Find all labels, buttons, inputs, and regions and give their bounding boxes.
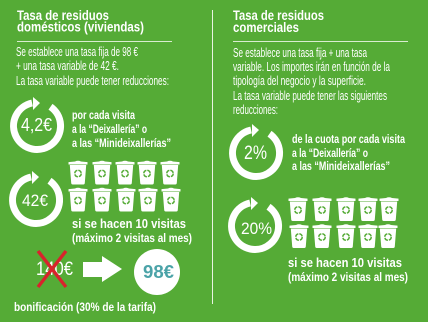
arrow: [83, 256, 122, 282]
text block: commercial rate description: tipología del negocio y la superficie.: [233, 74, 366, 88]
text block: ten visits: si se hacen 10 visitas: [72, 216, 186, 231]
text block: domestic rate description: La tasa variable puede tener reducciones:: [16, 74, 169, 88]
heading: domestic waste: domésticos (viviendas): [17, 20, 144, 34]
text block: commercial rate description: [233, 46, 390, 117]
icon: 2 percent cycle: 2%: [244, 143, 267, 164]
text block: per visit: [72, 110, 171, 150]
heading: commercial waste: Tasa de residuos: [233, 8, 324, 23]
text block: ten visits: [72, 216, 192, 245]
text block: ten visits: [288, 255, 408, 284]
heading: domestic waste: [17, 8, 144, 34]
text block: fee per visit: a la “Deixallería” o: [292, 148, 368, 160]
icon: 4,2 euro cycle: [14, 97, 61, 149]
icon: 20 percent cycle: 20%: [241, 219, 272, 238]
text block: ten visits: (máximo 2 visitas al mes): [288, 272, 408, 284]
icon group: ten recycling bins: [68, 161, 180, 212]
icon: 42 euro cycle: [13, 171, 60, 223]
caption: bonus: bonificación (30% de la tarifa): [14, 302, 156, 314]
text block: per visit: a las “Minideixallerías”: [72, 138, 171, 150]
badge: 98 euro: [134, 249, 180, 295]
icon group: ten recycling bins: [288, 197, 398, 248]
text block: ten visits: si se hacen 10 visitas: [288, 255, 402, 270]
text block: domestic rate description: + una tasa variable de 42 €.: [16, 59, 119, 73]
panel: residential waste: [13, 8, 192, 314]
icon: 42 euro cycle: 42€: [22, 191, 48, 210]
crossed out price: 140€: [36, 258, 73, 280]
heading: commercial waste: [233, 8, 324, 35]
crossed out price: [36, 251, 73, 287]
text block: commercial rate description: reducciones:: [233, 103, 278, 117]
text block: per visit: por cada visita: [72, 110, 135, 122]
text block: fee per visit: a las “Minideixallerías”: [292, 161, 390, 173]
icon: 4,2 euro cycle: 4,2€: [21, 115, 52, 135]
text block: domestic rate description: Se establece una tasa fija de 98 €: [16, 45, 138, 59]
heading: domestic waste: Tasa de residuos: [17, 8, 109, 23]
icon: 20 percent cycle: [232, 197, 279, 249]
badge: 98 euro: 98€: [143, 262, 174, 282]
heading: commercial waste: comerciales: [233, 20, 299, 35]
text block: domestic rate description: [16, 45, 169, 88]
text block: per visit: a la “Deixallería” o: [72, 124, 147, 136]
icon: 2 percent cycle: [233, 124, 280, 176]
text block: ten visits: (máximo 2 visitas al mes): [72, 233, 192, 245]
panel: commercial waste: [232, 8, 408, 284]
text block: fee per visit: [292, 134, 405, 173]
